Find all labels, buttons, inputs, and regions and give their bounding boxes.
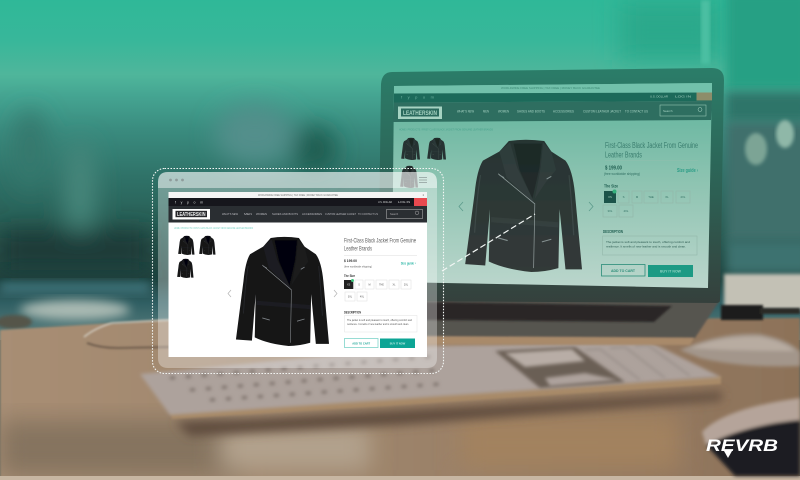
size options: M — [368, 284, 370, 286]
dark top bar: U.S. DOLLAR — [378, 200, 392, 204]
screen product title: Leather Brands — [605, 150, 642, 160]
menu items: SHOES AND BOOTS — [272, 212, 298, 216]
screen cart button — [696, 92, 712, 100]
size options: XL — [393, 284, 396, 286]
screen selected check — [612, 190, 616, 194]
dark top bar — [168, 198, 427, 206]
screen carousel arrows — [459, 202, 593, 211]
description: resilience. It smells of new leather and is smooth and clean. — [347, 323, 409, 326]
keyboard — [140, 342, 722, 436]
size options: 4XL — [360, 296, 365, 298]
add to cart button — [344, 338, 378, 348]
screen dark top bar: U.S. DOLLAR — [650, 94, 669, 98]
buy it now button: BUY IT NOW — [390, 341, 406, 345]
mouse — [680, 334, 800, 366]
price: (free worldwide shipping) — [344, 264, 372, 268]
size options: S — [358, 284, 360, 286]
main jacket — [236, 237, 329, 346]
screen size options — [603, 191, 690, 217]
screen size options: 2XL — [681, 195, 686, 199]
screen price — [604, 166, 640, 176]
screen product title — [605, 141, 698, 160]
logo — [172, 209, 210, 220]
product title — [344, 238, 416, 252]
size options — [344, 280, 411, 301]
screen add to cart button — [602, 264, 645, 276]
screen price: $ 199.00 — [605, 166, 622, 172]
screen size options: M — [636, 195, 639, 199]
menu items: WOMEN — [256, 212, 267, 216]
laptop screen — [392, 83, 712, 288]
size options: 2XL — [404, 284, 409, 286]
price: $ 199.00 — [344, 258, 358, 263]
screen size options: S — [623, 195, 625, 199]
screen price: (free worldwide shipping) — [604, 172, 640, 176]
screen nav text: TO CONTACT US — [625, 110, 649, 114]
screen buy it now button: BUY IT NOW — [660, 270, 682, 274]
screen description: The jacket is soft and pleasant to touch, offering comfort and — [606, 240, 690, 244]
announcement strip: WORLDWIDE FREE SHIPPING | TAX FREE | MONEY BACK GUARANTEE — [258, 193, 338, 197]
screen description: DESCRIPTION — [603, 229, 623, 234]
screen dark top bar — [394, 92, 712, 102]
description: DESCRIPTION — [344, 310, 361, 314]
screen search box: Search — [663, 109, 673, 113]
screen nav text — [457, 110, 649, 114]
screen title divider — [605, 159, 698, 162]
dark top bar: f y p o m — [175, 200, 203, 204]
screen size options: 3XL — [608, 209, 613, 213]
menu items: WHAT'S NEW — [222, 212, 238, 216]
frosted browser panel — [158, 172, 437, 368]
screen nav text: WHAT'S NEW — [457, 110, 475, 114]
product title: First-Class Black Jacket From Genuine — [344, 238, 416, 244]
screen nav text: MEN — [483, 110, 489, 114]
screen size guide: Size guide › — [677, 168, 698, 174]
screen size options: XL — [665, 195, 669, 199]
dashed connector line — [442, 214, 535, 271]
screen size options: XS — [608, 195, 612, 199]
search icon — [415, 211, 419, 215]
power adapter and cord — [721, 305, 800, 320]
cable — [84, 320, 170, 348]
screen dark top bar: f y p o m — [401, 94, 435, 100]
menu items: CUSTOM LEATHER JACKET — [325, 212, 356, 216]
dark top bar: LOG IN — [398, 200, 410, 204]
menu items: TO CONTACT US — [358, 212, 378, 216]
screen search box — [660, 105, 706, 116]
breadcrumb: HOME / PRODUCTS / FIRST-CLASS BLACK JACKET FROM GENUINE LEATHER BRANDS — [174, 226, 253, 230]
laptop lid — [378, 68, 724, 303]
background: white blur on the left — [20, 300, 130, 320]
laptop — [378, 68, 724, 345]
size options: 3XL — [348, 296, 353, 298]
laptop deck front lip — [378, 336, 694, 345]
description: The jacket is soft and pleasant to touch, offering comfort and — [347, 319, 413, 322]
hamburger icon — [419, 178, 427, 182]
size label: The Size — [344, 274, 355, 278]
browser title bar dots — [169, 179, 184, 181]
description — [344, 310, 417, 332]
size options: XS — [347, 284, 351, 286]
add to cart button: ADD TO CART — [352, 341, 371, 345]
screen nav text: CUSTOM LEATHER JACKET — [583, 110, 622, 114]
screen add to cart button: ADD TO CART — [611, 269, 636, 273]
navigation bar: Search — [390, 212, 399, 216]
screen logo — [398, 106, 442, 119]
dark cup at bottom right — [702, 398, 800, 476]
screen dark top bar: LOG IN — [675, 94, 691, 98]
size guide link: Size guide › — [401, 262, 416, 266]
size options: THE — [379, 284, 384, 286]
screen nav text: SHOES AND BOOTS — [517, 110, 546, 114]
background: wooden desk — [0, 318, 800, 480]
menu items: MEN — [244, 212, 252, 216]
screen nav text: WOMEN — [498, 110, 509, 114]
search box — [386, 210, 422, 218]
logo: LEATHERSKIN — [177, 212, 206, 218]
buy it now button — [380, 338, 415, 348]
carousel arrows — [228, 290, 337, 297]
thumbnail jackets — [177, 236, 216, 278]
keyboard dark well — [495, 347, 625, 388]
screen breadcrumb: HOME / PRODUCTS / FIRST-CLASS BLACK JACKET FROM GENUINE LEATHER BRANDS — [399, 128, 493, 132]
screen product title: First-Class Black Jacket From Genuine — [605, 141, 698, 150]
screen size label: The Size — [604, 184, 618, 188]
price — [344, 258, 372, 268]
screen description: resilience. It smells of new leather and is smooth and clean. — [606, 244, 686, 248]
laptop keyboard deck — [378, 298, 720, 338]
screen size options: 4XL — [624, 209, 629, 213]
screen thumbnails — [400, 138, 446, 188]
selected size check — [351, 279, 354, 282]
screen logo: LEATHERSKIN — [403, 111, 437, 117]
screen description — [602, 229, 697, 255]
dotted selection outline — [152, 168, 444, 374]
screen size options: THE — [648, 195, 654, 199]
announcement strip — [168, 192, 427, 198]
cart button — [414, 198, 427, 206]
title divider — [344, 254, 417, 257]
laptop keys — [425, 302, 672, 322]
keyboard keys — [170, 345, 690, 400]
product web page — [168, 192, 427, 357]
brand logo: REVRB — [706, 436, 778, 455]
screen announcement strip — [394, 83, 712, 94]
screen main jacket — [465, 140, 582, 272]
screen announcement strip: WORLDWIDE FREE SHIPPING | TAX FREE | MONEY BACK GUARANTEE — [501, 86, 600, 90]
screen nav bar — [393, 101, 712, 122]
menu items — [222, 212, 378, 216]
browser title bar — [158, 172, 437, 188]
screen nav text: ACCESSORIES — [553, 110, 575, 114]
screen buy it now button — [648, 265, 693, 277]
menu items: ACCESSORIES — [302, 212, 322, 216]
navigation bar — [168, 206, 427, 222]
product title: Leather Brands — [344, 246, 372, 252]
announcement strip: × — [422, 193, 424, 197]
background: right window area — [701, 0, 800, 310]
background: blurred office wall with teal overlay — [0, 0, 800, 340]
